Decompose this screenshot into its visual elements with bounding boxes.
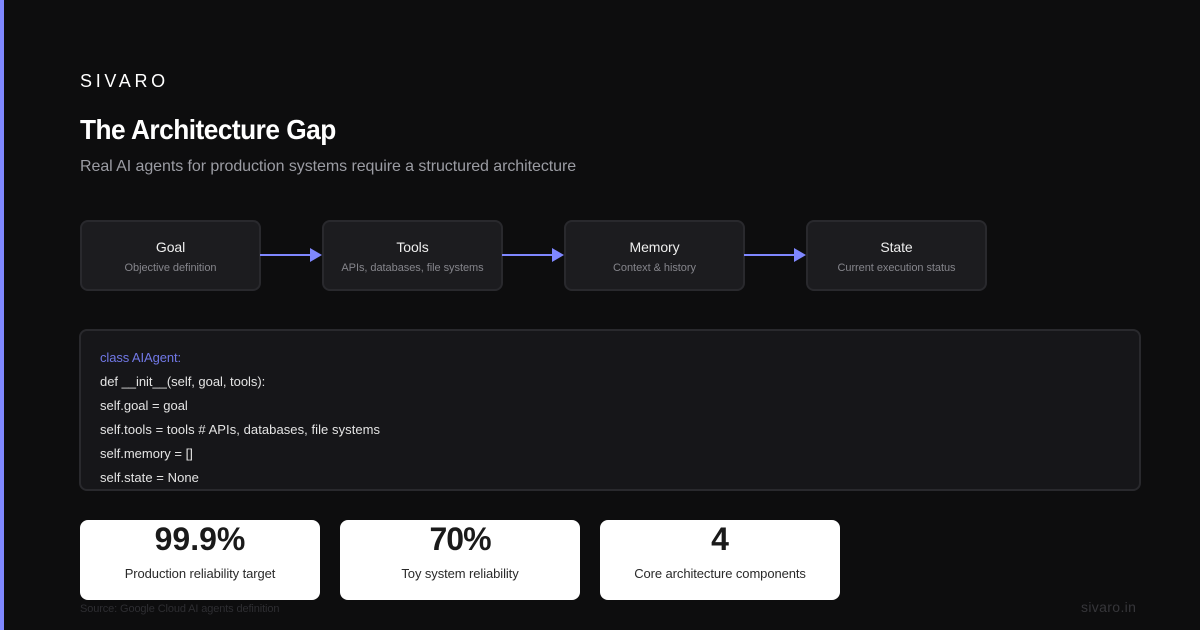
- node: memory: Memory: [630, 239, 679, 255]
- node: state: Current execution status: [837, 262, 956, 274]
- node: goal: Goal: [156, 239, 185, 255]
- stat card: components: [600, 520, 840, 600]
- code line: class: class AIAgent:: [100, 350, 181, 365]
- brand wordmark: SIVARO: [80, 71, 169, 91]
- code line: memory: self.memory = []: [100, 446, 193, 461]
- stat card: production reliability: 99.9%: [155, 521, 245, 557]
- stat card: toy reliability: [340, 520, 580, 600]
- panel: code block: [79, 329, 1141, 491]
- accent bar: [0, 0, 4, 630]
- stat card: components: Core architecture components: [634, 566, 806, 581]
- code line: init: def __init__(self, goal, tools):: [100, 374, 265, 389]
- stat card: toy reliability: Toy system reliability: [401, 566, 519, 581]
- subtitle: Real AI agents for production systems require a structured architecture: [80, 158, 576, 175]
- footer url: sivaro.in: [1081, 599, 1136, 615]
- arrow: goal to tools: [260, 248, 322, 262]
- node: goal: Objective definition: [125, 262, 216, 274]
- stat card: production reliability: Production reliability target: [125, 566, 275, 581]
- node: state: [806, 220, 987, 291]
- node: goal: [80, 220, 261, 291]
- code line: tools: self.tools = tools # APIs, databases, file systems: [100, 422, 380, 437]
- stat card: components: 4: [711, 521, 729, 557]
- node: tools: [322, 220, 503, 291]
- code line: goal: self.goal = goal: [100, 398, 188, 413]
- stat card: toy reliability: 70%: [429, 521, 491, 557]
- node: memory: [564, 220, 745, 291]
- node: tools: APIs, databases, file systems: [341, 262, 484, 274]
- title: The Architecture Gap: [80, 114, 336, 145]
- stat card: production reliability: [80, 520, 320, 600]
- source note: Source: Google Cloud AI agents definition: [80, 603, 279, 615]
- node: tools: Tools: [396, 239, 429, 255]
- node: memory: Context & history: [613, 262, 696, 274]
- panel: architecture flow: [80, 220, 987, 291]
- code line: state: self.state = None: [100, 470, 199, 485]
- node: state: State: [880, 239, 913, 255]
- arrow: tools to memory: [502, 248, 564, 262]
- arrow: memory to state: [744, 248, 806, 262]
